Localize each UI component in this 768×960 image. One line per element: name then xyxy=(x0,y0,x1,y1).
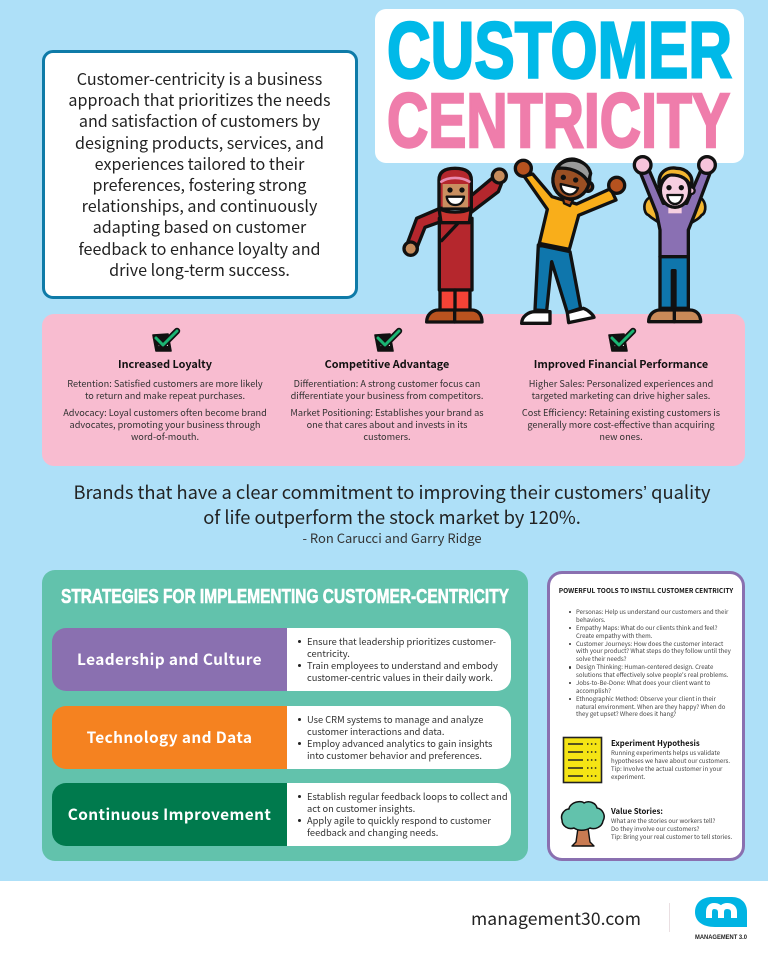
value stories text xyxy=(611,806,732,841)
strategy label: continuous improvement xyxy=(52,783,287,846)
strategy label: technology: Technology and Data xyxy=(87,726,252,748)
intro paragraph: relationships, and continuously xyxy=(82,193,317,217)
tools list: Ethnographic Method: Observe your client in their xyxy=(576,694,716,703)
strategy text: continuous improvement: Apply agile to quickly respond to customer xyxy=(307,813,491,827)
experiment hypothesis text: hypotheses we have about our customers. xyxy=(611,756,730,765)
advocacy text xyxy=(63,405,267,443)
experiment hypothesis text: Experiment Hypothesis xyxy=(611,738,700,749)
benefits panel xyxy=(42,314,745,466)
strategy label: leadership: Leadership and Culture xyxy=(77,648,262,670)
tools list: with your product? What steps do they follow until they xyxy=(576,646,731,655)
benefit column: improved financial performance xyxy=(522,328,720,443)
footer xyxy=(0,881,768,960)
quote attribution: - Ron Carucci and Garry Ridge xyxy=(302,528,482,547)
strategy text: continuous improvement: Establish regular feedback loops to collect and xyxy=(307,789,508,803)
retention text: Retention: Satisfied customers are more likely xyxy=(67,376,263,390)
market positioning text: customers. xyxy=(363,429,411,443)
tools list: Empathy Maps: What do our clients think and feel? xyxy=(576,623,718,632)
value stories text: What are the stories our workers tell? xyxy=(611,816,715,825)
tools list: Create empathy with them. xyxy=(576,631,652,640)
logo: MANAGEMENT 3.0 xyxy=(695,934,747,941)
tools list: Customer Journeys: How does the customer interact xyxy=(576,638,723,648)
experiment hypothesis text: Tip: Involve the actual customer in your xyxy=(611,764,722,773)
advocacy text: advocates, promoting your business through xyxy=(70,417,260,431)
market positioning text: Market Positioning: Establishes your brand as xyxy=(290,405,484,419)
people illustration xyxy=(402,155,717,325)
differentiation text xyxy=(291,376,483,402)
strategy text: technology: customer interactions and data. xyxy=(307,724,444,738)
benefit column: increased loyalty xyxy=(63,328,267,443)
strategy label: continuous improvement: Continuous Improvement xyxy=(68,803,271,825)
strategy label: leadership xyxy=(52,628,287,691)
quote: of life outperform the stock market by 120%. xyxy=(203,504,581,530)
icon: check mark xyxy=(152,328,180,352)
experiment hypothesis text: Running experiments helps us validate xyxy=(611,748,720,757)
strategy text: leadership: customer-centric values in their daily work. xyxy=(307,670,493,684)
heading: Competitive Advantage xyxy=(325,356,449,372)
logo xyxy=(695,897,747,941)
retention text xyxy=(67,376,263,402)
strategy text: leadership: Ensure that leadership prioritizes customer- xyxy=(307,634,496,648)
strategy text: technology: Use CRM systems to manage and analyze xyxy=(307,712,483,726)
cost efficiency text: new ones. xyxy=(599,429,643,443)
experiment hypothesis text xyxy=(611,738,730,781)
heading: Improved Financial Performance xyxy=(534,356,708,372)
strategy label: technology xyxy=(52,706,287,769)
tools list: solutions that effectively solve people's real problems. xyxy=(576,670,728,679)
intro paragraph: approach that prioritizes the needs xyxy=(68,87,331,111)
strategy text: leadership xyxy=(287,628,511,691)
benefit column: competitive advantage xyxy=(290,328,484,443)
higher sales text xyxy=(529,376,713,402)
strategy text: technology xyxy=(287,706,511,769)
cost efficiency text: generally more cost-effective than acquiring xyxy=(527,417,715,431)
quote xyxy=(73,479,711,530)
title panel xyxy=(375,9,744,163)
higher sales text: targeted marketing can drive higher sales. xyxy=(532,388,710,402)
icon: tree xyxy=(560,800,605,847)
strategy text: leadership: centricity. xyxy=(307,646,350,660)
experiment hypothesis text: experiment. xyxy=(611,772,645,781)
tools list: natural environment. When are they happy? When do xyxy=(576,702,725,710)
heading: Increased Loyalty xyxy=(118,356,212,372)
intro paragraph: experiences tailored to their xyxy=(95,151,304,175)
tools list: behaviors. xyxy=(576,615,605,624)
tools list: Jobs-to-Be-Done: What does your client want to xyxy=(576,678,710,687)
market positioning text: one that cares about and invests in its xyxy=(307,417,467,431)
intro paragraph xyxy=(68,66,331,281)
footer divider xyxy=(669,903,670,932)
intro text panel xyxy=(42,50,358,299)
strategy text: leadership: Train employees to understand and embody xyxy=(307,658,498,672)
strategy text: technology: Employ advanced analytics to gain insights xyxy=(307,736,492,750)
market positioning text xyxy=(290,405,484,443)
tools heading: POWERFUL TOOLS TO INSTILL CUSTOMER CENTRICITY xyxy=(559,585,733,595)
intro paragraph: adapting based on customer xyxy=(93,214,306,238)
differentiation text: differentiate your business from competitors. xyxy=(291,388,483,402)
retention text: to return and make repeat purchases. xyxy=(85,388,245,402)
strategy text: continuous improvement: feedback and changing needs. xyxy=(307,825,438,839)
icon: experiment checklist xyxy=(562,736,602,784)
intro paragraph: preferences, fostering strong xyxy=(93,172,306,196)
differentiation text: Differentiation: A strong customer focus can xyxy=(294,376,480,390)
value stories text: Value Stories: xyxy=(611,806,663,817)
tools list: solve their needs? xyxy=(576,654,626,663)
tools list: Design Thinking: Human-centered design. Create xyxy=(576,662,713,671)
higher sales text: Higher Sales: Personalized experiences and xyxy=(529,376,713,390)
tools list: Personas: Help us understand our customers and their xyxy=(576,607,728,616)
intro paragraph: designing products, services, and xyxy=(75,130,324,154)
icon: check mark xyxy=(374,328,402,352)
panel: tools xyxy=(547,571,745,861)
strategy text: continuous improvement xyxy=(287,783,511,846)
person: yellow sweater xyxy=(515,155,625,323)
intro paragraph: and satisfaction of customers by xyxy=(79,108,320,132)
person: red outfit xyxy=(404,168,506,322)
intro paragraph: drive long-term success. xyxy=(109,257,290,281)
tools list xyxy=(569,607,731,718)
advocacy text: word-of-mouth. xyxy=(131,429,199,443)
website: management30.com xyxy=(471,906,641,931)
intro paragraph: Customer-centricity is a business xyxy=(77,66,322,90)
cost efficiency text: Cost Efficiency: Retaining existing customers is xyxy=(522,405,720,419)
strategy text: continuous improvement: act on customer insights. xyxy=(307,801,415,815)
advocacy text: Advocacy: Loyal customers often become brand xyxy=(63,405,267,419)
quote: Brands that have a clear commitment to improving their customers’ quality xyxy=(73,479,711,505)
tools list: accomplish? xyxy=(576,686,611,695)
cost efficiency text xyxy=(522,405,720,443)
title text xyxy=(387,9,732,163)
strategy text: technology: into customer behavior and preferences. xyxy=(307,748,482,762)
intro paragraph: feedback to enhance loyalty and xyxy=(78,236,321,260)
icon: check mark xyxy=(608,328,636,352)
value stories text: Do they involve our customers? xyxy=(611,824,699,833)
person: purple top xyxy=(634,157,715,322)
tools list: they get upset? Where does it hang? xyxy=(576,709,676,718)
panel: strategies xyxy=(42,570,528,861)
value stories text: Tip: Bring your real customer to tell stories. xyxy=(611,832,732,841)
